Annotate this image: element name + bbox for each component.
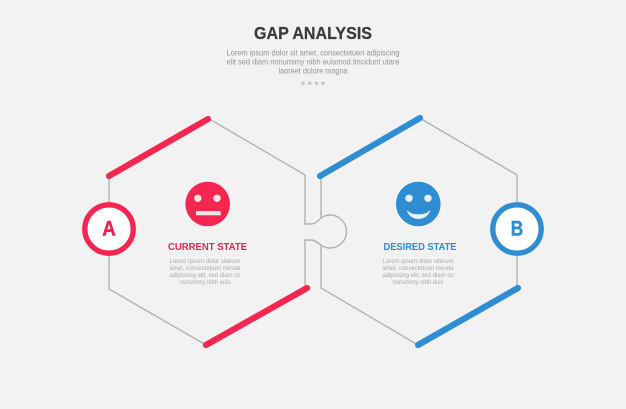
hexagon outline A bbox=[109, 119, 311, 345]
badge A: A bbox=[102, 218, 116, 240]
panel: desired state bbox=[311, 118, 541, 345]
badge A bbox=[85, 205, 133, 253]
body text: current state: nonummy nibh euis bbox=[180, 279, 230, 286]
body text: desired state: amet, consectetueri mesda bbox=[382, 265, 454, 272]
intro text bbox=[226, 48, 400, 76]
body text: desired state bbox=[382, 258, 454, 286]
panel: current state bbox=[85, 119, 311, 345]
body text: current state: Lorem ipsum dolor siterum bbox=[170, 258, 240, 265]
pagination dots bbox=[301, 82, 325, 85]
heading: current state: CURRENT STATE bbox=[168, 242, 247, 253]
red accent bar top bbox=[109, 119, 208, 176]
badge B: B bbox=[511, 218, 523, 240]
body text: desired state: nonummy nibh euis bbox=[392, 279, 444, 286]
heading: desired state: DESIRED STATE bbox=[384, 242, 457, 253]
icon: smiling face bbox=[396, 182, 441, 226]
title: GAP ANALYSIS bbox=[254, 23, 372, 43]
intro text: Lorem ipsum dolor sit amet, consectetueri adipiscing bbox=[226, 48, 400, 58]
intro text: elit sed diam nonumimy nibh euismod tincidunt utare bbox=[226, 58, 400, 66]
blue accent bar bottom bbox=[418, 288, 518, 345]
badge B bbox=[493, 205, 541, 253]
blue accent bar top bbox=[320, 118, 420, 176]
body text: desired state: adipiscing elit, sed diam co bbox=[382, 272, 454, 279]
intro text: laoreet dolore magna bbox=[278, 66, 348, 76]
red accent bar bottom bbox=[206, 288, 307, 345]
body text: current state: amet, consectetueri mesda bbox=[170, 265, 241, 272]
body text: desired state: Lorem ipsum dolor siterum bbox=[382, 258, 454, 265]
body text: current state: adipiscing elit, sed diam co bbox=[170, 272, 241, 279]
hexagon outline B with puzzle knob bbox=[311, 118, 517, 345]
icon: neutral face bbox=[185, 182, 230, 226]
body text: current state bbox=[170, 258, 241, 286]
